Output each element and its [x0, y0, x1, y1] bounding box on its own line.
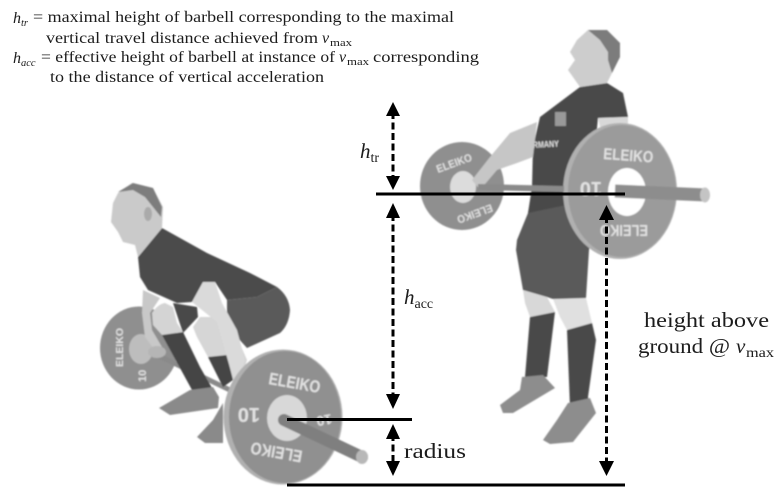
far arm [142, 290, 162, 353]
far sock [162, 332, 212, 390]
label: height above ground at v_max: v [736, 334, 746, 358]
front weight plate: ELEIKO [249, 438, 304, 466]
definition of h_tr [13, 9, 455, 49]
near arm [192, 282, 245, 383]
label: height above ground at v_max [638, 308, 774, 361]
head and neck [568, 30, 620, 87]
line: height at v_max [376, 192, 625, 196]
front weight plate [224, 350, 342, 484]
definition of h_tr: vertical travel distance achieved from [46, 30, 319, 47]
definition of h_acc: v [339, 49, 347, 66]
hand on bar [148, 346, 166, 358]
label: height above ground at v_max: max [746, 346, 774, 361]
label: height above ground at v_max: ground @ [638, 334, 730, 358]
definition of h_tr: = maximal height of barbell corresponding to the maximal [33, 9, 455, 26]
head and neck [111, 183, 163, 257]
shoes [500, 375, 596, 444]
front weight plate: ELEIKO [600, 221, 648, 238]
line: ground [287, 484, 625, 486]
definition of h_acc [13, 49, 479, 86]
definition of h_tr: tr [21, 18, 29, 29]
definition of h_acc: = effective height of barbell at instance of [41, 49, 336, 66]
rear weight plate: ELEIKO [435, 152, 474, 176]
front weight plate: 10 [315, 411, 333, 430]
label: h_acc: h [404, 285, 414, 309]
definition of h_tr: h [13, 10, 21, 27]
rear weight plate: 10 [137, 370, 149, 382]
shirt [528, 83, 628, 213]
definition of h_acc: h [13, 50, 21, 67]
socks [525, 312, 596, 407]
definition of h_acc: corresponding [373, 49, 479, 66]
near sock [208, 355, 233, 387]
far arm [472, 122, 537, 190]
far shoe [159, 387, 219, 415]
front bar end [284, 420, 362, 457]
label: h_tr: h [360, 139, 370, 163]
knees [523, 290, 592, 330]
definition of h_tr: v [322, 30, 330, 47]
shirt [138, 228, 277, 303]
arrow: h_tr [386, 102, 400, 190]
definition of h_acc: max [347, 57, 370, 68]
front weight plate: ELEIKO [267, 369, 322, 397]
definition of h_acc: acc [21, 58, 36, 69]
far knee [152, 303, 183, 335]
rear weight plate: ELEIKO [455, 201, 494, 225]
rear bar [157, 355, 232, 391]
front weight plate [563, 123, 677, 259]
label: h_acc: acc [414, 297, 433, 312]
label: height above ground at v_max: height above [644, 308, 769, 332]
definition of h_tr: max [330, 38, 353, 49]
bar [478, 187, 564, 189]
near arm [598, 117, 628, 127]
lifter: start position [100, 183, 368, 484]
definition of h_acc: to the distance of vertical acceleration [50, 69, 324, 86]
label: radius: radius [404, 439, 466, 463]
front weight plate: 10 [580, 177, 602, 199]
crest [555, 112, 566, 126]
reference lines [287, 194, 625, 485]
arrow: radius [386, 424, 400, 476]
near shoe [197, 403, 223, 443]
shorts [516, 190, 600, 299]
lifter: extended position [420, 30, 710, 444]
front weight plate: 10 [238, 403, 260, 425]
rear weight plate [420, 142, 504, 230]
shorts [227, 287, 290, 348]
line: bar centre at start [287, 418, 412, 421]
rear weight plate [100, 306, 178, 390]
rear weight plate: ELEIKO [115, 328, 126, 367]
arrow: h_acc [386, 203, 400, 409]
lifter: extended position: RMANY [533, 139, 559, 150]
front weight plate: ELEIKO [603, 146, 654, 166]
definitions text block [13, 9, 479, 86]
label: h_tr: tr [370, 151, 379, 166]
near thigh and lower leg [193, 317, 247, 380]
arrow: height above ground [599, 205, 614, 476]
